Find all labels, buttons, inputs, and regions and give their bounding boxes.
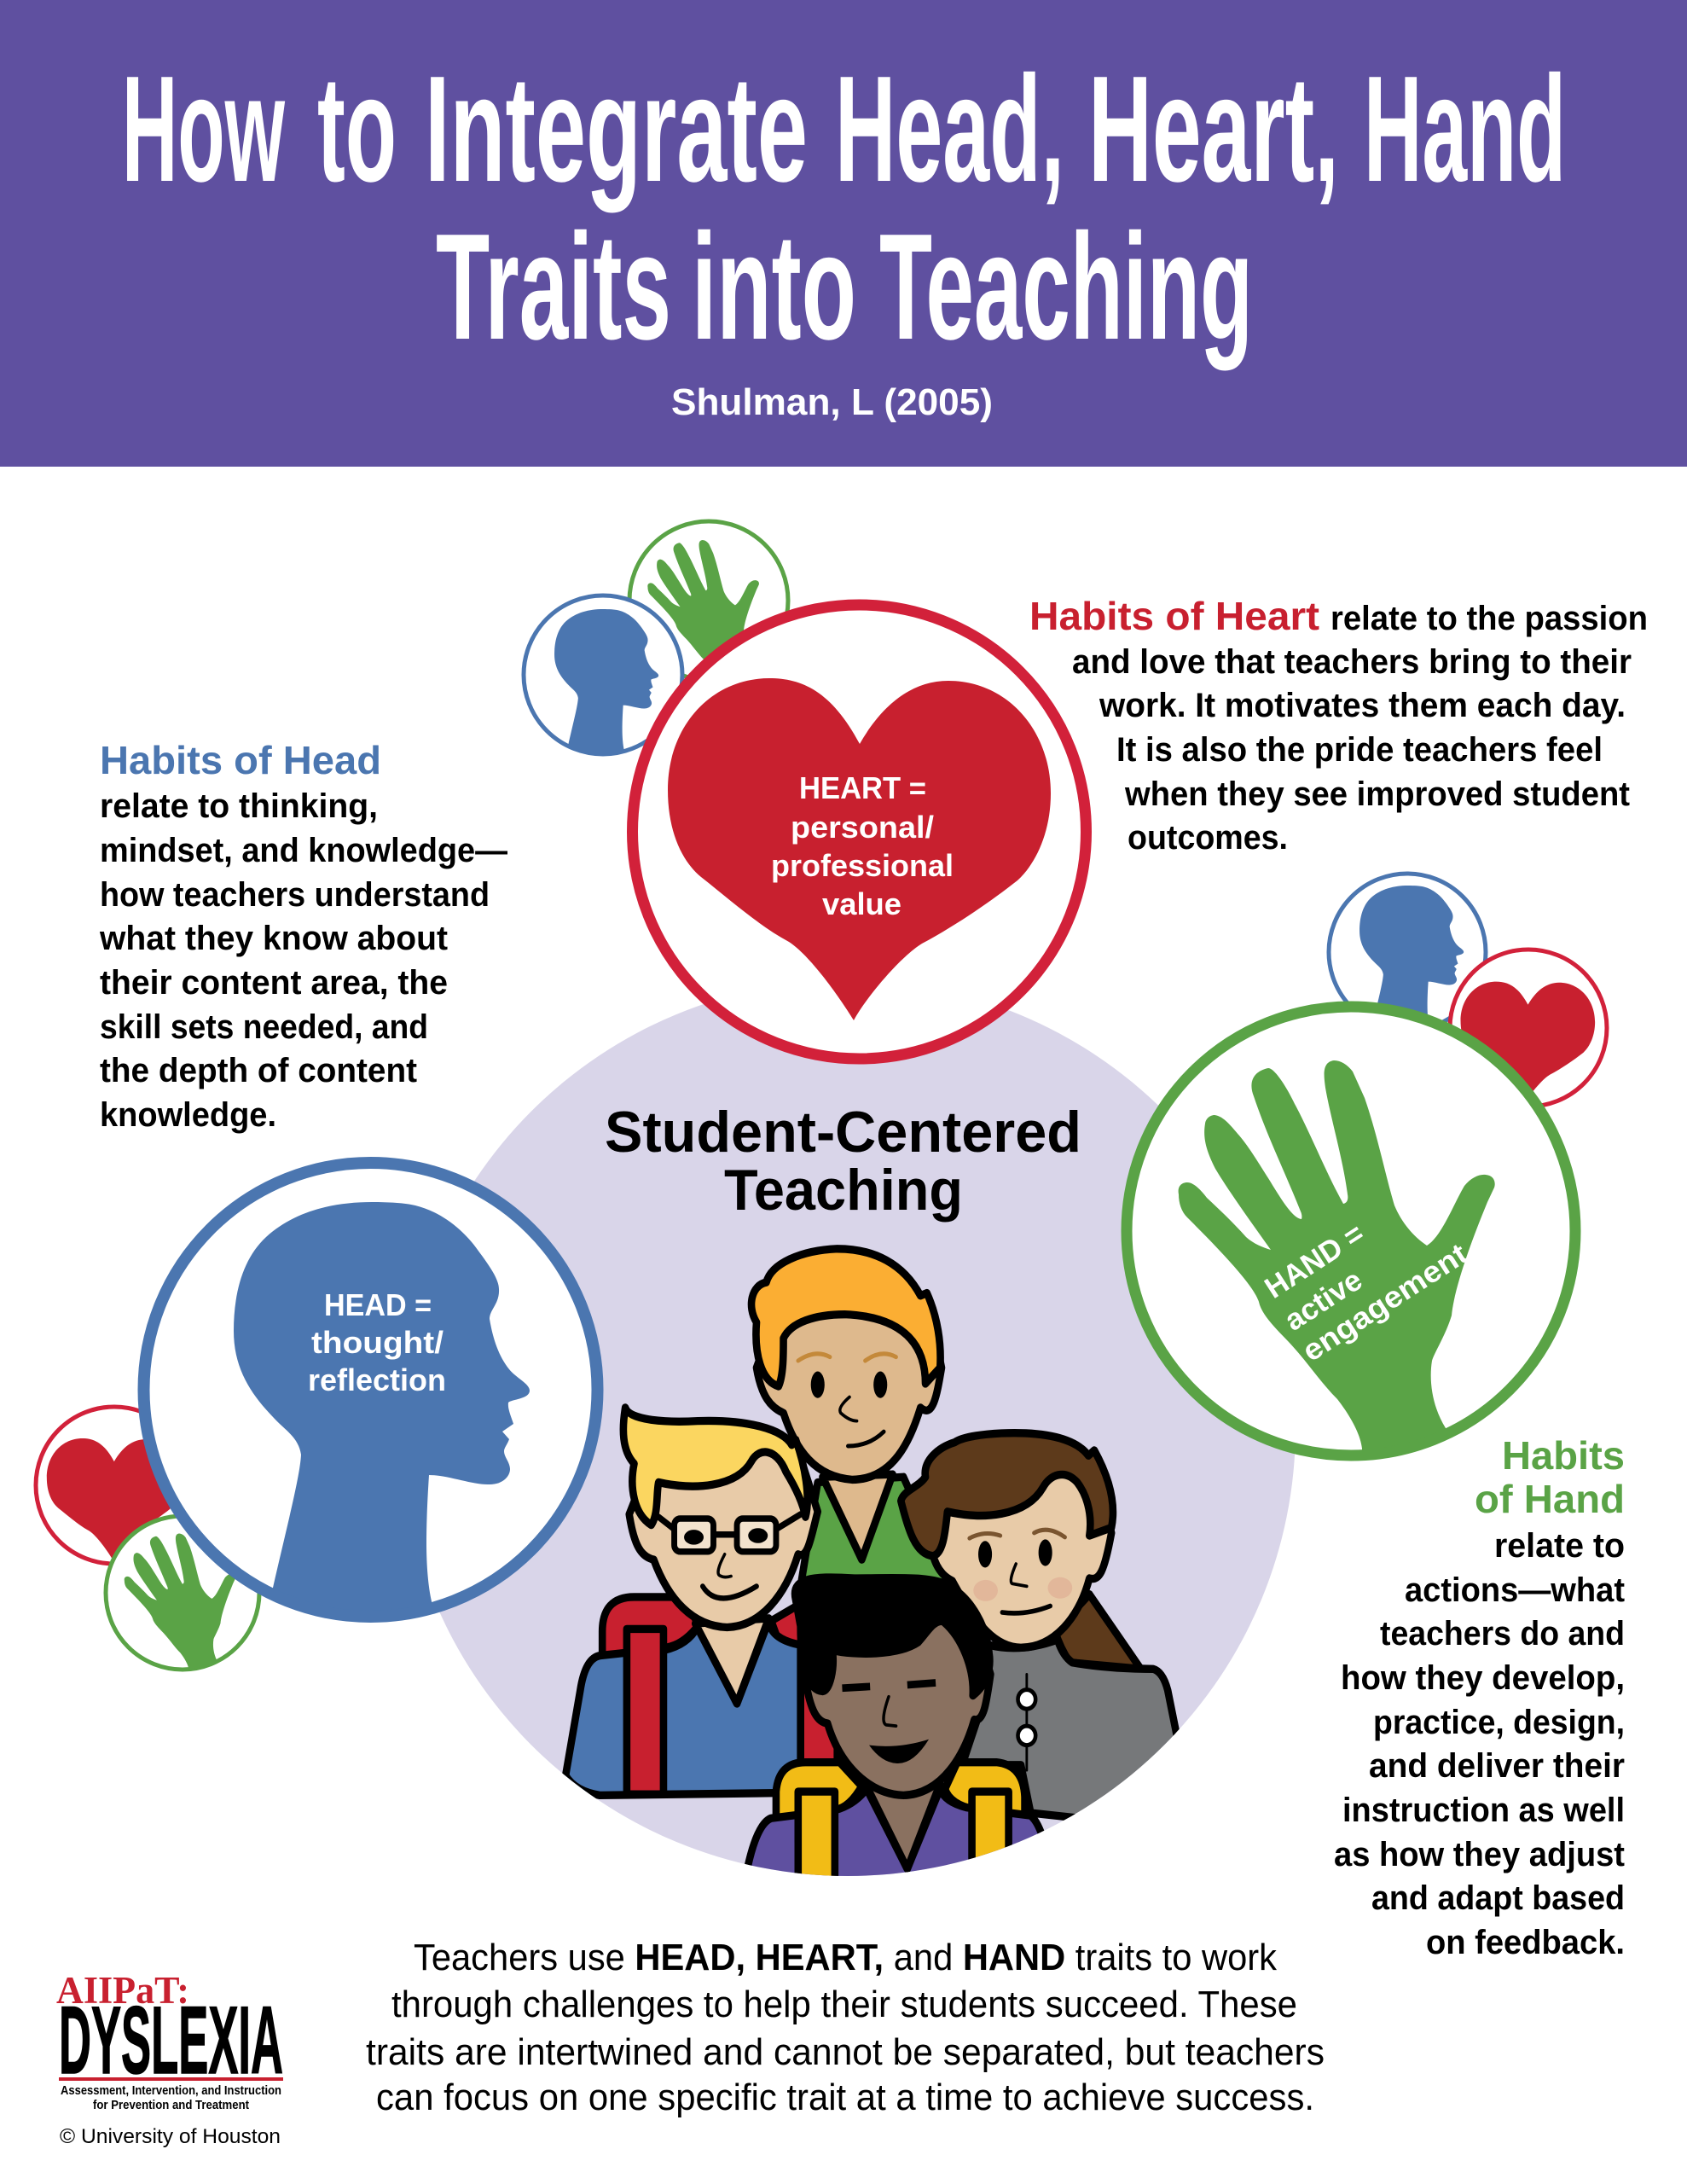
body: actions—what [1405, 1571, 1625, 1609]
body: instruction as well [1342, 1792, 1625, 1829]
text block: Habits of Heart [1029, 594, 1648, 857]
heart label: value [822, 886, 901, 921]
text: DYSLEXIA [59, 1987, 283, 2094]
body: teachers do and [1380, 1615, 1625, 1653]
body: mindset, and knowledge— [100, 832, 507, 869]
text block: Habits of Hand [1334, 1433, 1625, 1961]
small hand circle [629, 521, 788, 680]
logo: AIIPaT Dyslexia: for Prevention and Treatment [93, 2098, 249, 2112]
heart label [771, 770, 954, 921]
body: practice, design, [1373, 1704, 1625, 1741]
small hand circle [106, 1516, 259, 1672]
central lavender circle [400, 980, 1296, 1876]
heading: Habits of Head [100, 738, 381, 782]
student: black hair, front [747, 1577, 1048, 1903]
citation: Shulman, L (2005) [671, 381, 993, 423]
title: Integrate [425, 44, 808, 213]
body: It is also the pride teachers feel [1116, 731, 1603, 769]
body: the depth of content [100, 1052, 417, 1089]
logo: AIIPaT Dyslexia: AIIPaT: [56, 1969, 189, 2012]
body: how they develop, [1341, 1659, 1625, 1697]
body: and adapt based [1371, 1879, 1625, 1917]
hand label: engagement [1296, 1237, 1474, 1368]
body [1334, 1527, 1625, 1961]
body: skill sets needed, and [100, 1008, 428, 1046]
head label: reflection [308, 1362, 446, 1397]
body [99, 787, 507, 1134]
small head circle [1329, 874, 1486, 1033]
title: Head, [835, 44, 1064, 213]
head label: HEAD = [324, 1287, 432, 1322]
big hand circle [1127, 1007, 1575, 1455]
body: relate to the passion [1330, 600, 1648, 637]
title [122, 44, 1566, 371]
big heart circle [633, 605, 1087, 1059]
heading: Habits of Heart [1029, 594, 1319, 638]
title: How [122, 44, 286, 213]
title: Traits [436, 202, 671, 371]
body: what they know about [99, 920, 448, 957]
title: into [692, 202, 856, 371]
left icon cluster: heart, hand, head [36, 1163, 597, 1672]
body: work. It motivates them each day. [1099, 687, 1626, 724]
heart label: professional [771, 848, 954, 883]
small head circle [524, 595, 682, 757]
bottom summary paragraph: can focus on one specific trait at a time to achieve success. [376, 2077, 1314, 2118]
body: knowledge. [100, 1096, 276, 1134]
body: outcomes. [1128, 819, 1288, 857]
bottom summary paragraph: through challenges to help their students succeed. These [391, 1984, 1297, 2025]
heading: Habits [1502, 1433, 1625, 1478]
title: Teaching [879, 202, 1253, 371]
hand label: active [1278, 1263, 1368, 1338]
hand label: HAND = [1259, 1217, 1370, 1305]
central heading: Student-Centered Teaching: Teaching [724, 1158, 963, 1223]
student: blond with glasses [565, 1408, 838, 1795]
body: relate to [1494, 1527, 1625, 1565]
body: relate to thinking, [100, 787, 378, 825]
illustration: four students [565, 1249, 1185, 1903]
central heading: Student-Centered Teaching [605, 1100, 1081, 1223]
body [1072, 600, 1648, 857]
body: and love that teachers bring to their [1072, 643, 1632, 681]
body: their content area, the [100, 964, 448, 1002]
heart label: personal/ [791, 810, 934, 845]
bottom summary paragraph: Teachers use HEAD, HEART, and HAND traits to work [414, 1937, 1278, 1978]
body: how teachers understand [100, 876, 490, 914]
head label [308, 1287, 446, 1397]
heading [1475, 1433, 1625, 1521]
heart label: HEART = [799, 770, 926, 805]
heading: of Hand [1475, 1477, 1625, 1521]
logo: AIIPaT Dyslexia: Assessment, Intervention, and Instruction [61, 2083, 281, 2098]
student: brunette [901, 1433, 1185, 1818]
hand label [1259, 1217, 1474, 1368]
body: when they see improved student [1124, 775, 1630, 813]
student: orange hair [751, 1249, 953, 1586]
header banner [0, 0, 1687, 467]
bottom summary paragraph [366, 1937, 1325, 2118]
top icon cluster: hand, head, heart [524, 521, 1087, 1059]
body: as how they adjust [1334, 1836, 1625, 1873]
small heart circle [1450, 950, 1607, 1107]
title: to [317, 44, 397, 213]
head label: thought/ [311, 1325, 443, 1360]
title: Heart, [1088, 44, 1339, 213]
central heading: Student-Centered Teaching: Student-Centered [605, 1100, 1081, 1165]
text block: Habits of Head [99, 738, 507, 1134]
logo: AIIPaT Dyslexia [56, 1969, 283, 2112]
small heart circle [34, 1404, 171, 1566]
body: and deliver their [1369, 1747, 1625, 1785]
big head circle [143, 1163, 597, 1621]
right icon cluster: head, heart, hand [1127, 874, 1607, 1455]
body: on feedback. [1426, 1924, 1625, 1961]
copyright: © University of Houston [60, 2125, 281, 2148]
bottom summary paragraph: traits are intertwined and cannot be separated, but teachers [366, 2031, 1325, 2073]
